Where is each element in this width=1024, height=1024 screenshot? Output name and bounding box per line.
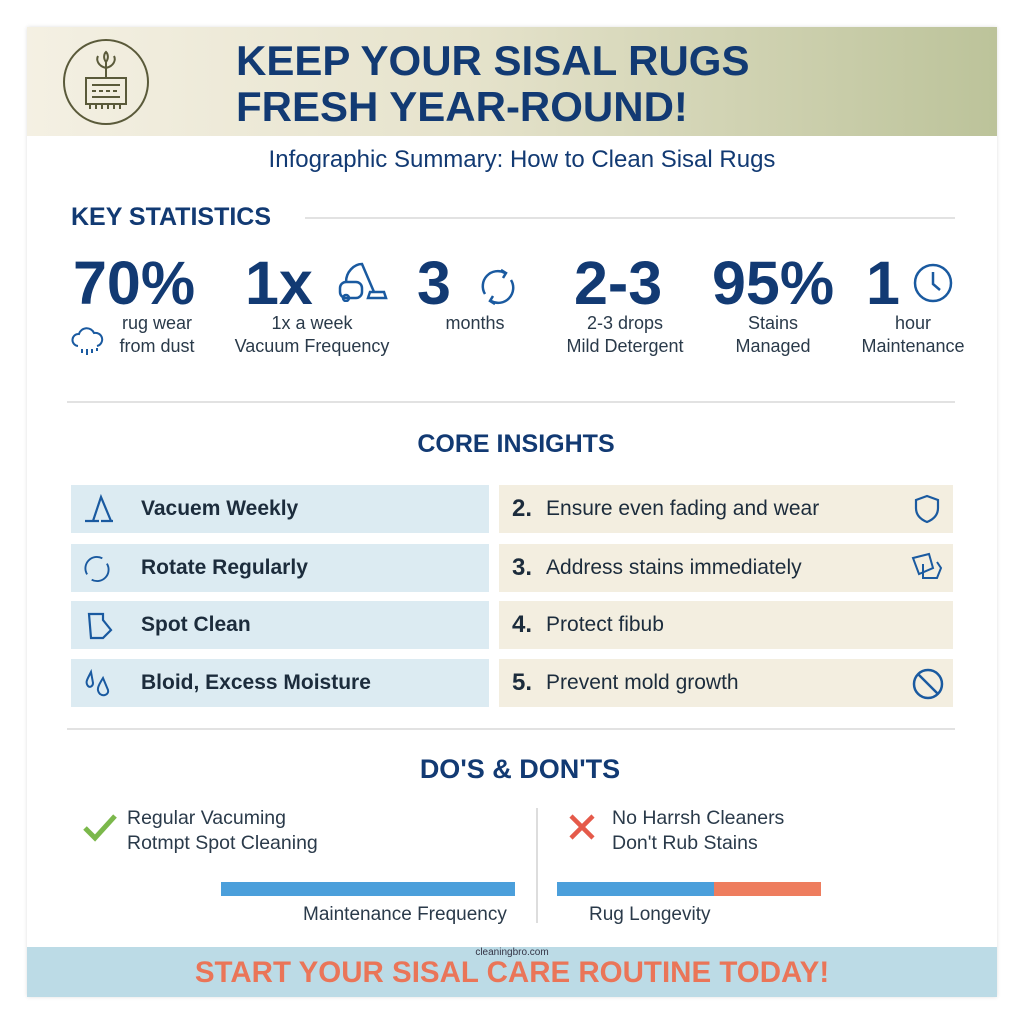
stat: 70%: from dust bbox=[119, 336, 195, 356]
stat: 3 months bbox=[417, 249, 514, 333]
stat: 70% bbox=[72, 249, 195, 356]
insight 5: Prevent mold growth bbox=[546, 671, 739, 694]
stat: 1x: 1x bbox=[245, 249, 313, 317]
insight: spot clean bbox=[71, 601, 489, 649]
insight: rotate bbox=[71, 544, 489, 592]
insight 4 bbox=[499, 601, 953, 649]
stat: 3 months: months bbox=[445, 313, 505, 333]
insight 4: 4. bbox=[512, 611, 532, 638]
insight: vacuum weekly bbox=[71, 485, 489, 533]
do list bbox=[83, 807, 318, 854]
bar: rug longevity bbox=[557, 882, 821, 925]
insight: moisture bbox=[71, 659, 489, 707]
stat: 1x bbox=[234, 249, 390, 356]
stat: 95%: Managed bbox=[735, 336, 811, 356]
icon: rug with plant bbox=[63, 39, 149, 125]
insight 2 bbox=[499, 485, 953, 533]
do list: Rotmpt Spot Cleaning bbox=[127, 832, 318, 854]
stat: 95%: Stains bbox=[748, 313, 798, 333]
do list: Regular Vacuming bbox=[127, 807, 286, 829]
heading: key statistics: KEY STATISTICS bbox=[71, 203, 271, 231]
stat: 1x: Vacuum Frequency bbox=[235, 336, 389, 356]
dont list: Don't Rub Stains bbox=[612, 832, 758, 854]
dont list: No Harrsh Cleaners bbox=[612, 807, 784, 829]
footer banner: cleaningbro.com bbox=[475, 947, 549, 958]
heading: core insights: CORE INSIGHTS bbox=[417, 430, 615, 458]
bar: maintenance frequency: Maintenance Frequency bbox=[303, 904, 507, 925]
insight 4: Protect fibub bbox=[546, 613, 664, 636]
icon: vacuum bbox=[338, 262, 388, 302]
insight 3 bbox=[499, 544, 953, 592]
title: FRESH YEAR-ROUND! bbox=[236, 83, 688, 130]
stat: 70%: 70% bbox=[73, 249, 195, 317]
stat: 3 months: 3 bbox=[417, 249, 451, 317]
stat: 2-3 drops: 2-3 bbox=[574, 249, 662, 317]
insight 5 bbox=[499, 659, 953, 707]
footer banner bbox=[27, 947, 997, 997]
stat: 2-3 drops: 2-3 drops bbox=[587, 313, 663, 333]
stat: 1 hour: hour bbox=[895, 313, 931, 333]
stat: 1x: 1x a week bbox=[271, 313, 353, 333]
insight 3: Address stains immediately bbox=[546, 556, 802, 579]
footer banner: START YOUR SISAL CARE ROUTINE TODAY! bbox=[195, 956, 829, 989]
title bbox=[236, 37, 749, 130]
insight 2: 2. bbox=[512, 495, 532, 522]
icon: clock bbox=[914, 264, 952, 302]
title: KEEP YOUR SISAL RUGS bbox=[236, 37, 749, 84]
insight 5: 5. bbox=[512, 669, 532, 696]
stat: 2-3 drops bbox=[566, 249, 684, 356]
stat: 95%: 95% bbox=[712, 249, 834, 317]
insight: spot clean: Spot Clean bbox=[141, 613, 251, 636]
insight: moisture: Bloid, Excess Moisture bbox=[141, 671, 371, 694]
insight: vacuum weekly: Vacuem Weekly bbox=[141, 497, 298, 520]
stat: 1 hour bbox=[861, 249, 965, 356]
bar: maintenance frequency bbox=[221, 882, 515, 925]
dont list bbox=[570, 807, 784, 854]
bar: rug longevity: Rug Longevity bbox=[589, 904, 710, 925]
insight: rotate: Rotate Regularly bbox=[141, 556, 308, 579]
stat: 1 hour: 1 bbox=[866, 249, 900, 317]
insight 2: Ensure even fading and wear bbox=[546, 497, 819, 520]
header banner bbox=[27, 27, 997, 136]
icon: dust cloud bbox=[72, 327, 104, 355]
stat: 95% bbox=[712, 249, 834, 356]
heading: dos and donts: DO'S & DON'TS bbox=[420, 754, 620, 784]
icon: rotate bbox=[482, 268, 514, 306]
insight 3: 3. bbox=[512, 554, 532, 581]
stat: 70%: rug wear bbox=[122, 313, 192, 333]
stat: 1 hour: Maintenance bbox=[861, 336, 965, 356]
stat: 2-3 drops: Mild Detergent bbox=[566, 336, 684, 356]
subtitle: Infographic Summary: How to Clean Sisal Rugs bbox=[269, 146, 775, 173]
